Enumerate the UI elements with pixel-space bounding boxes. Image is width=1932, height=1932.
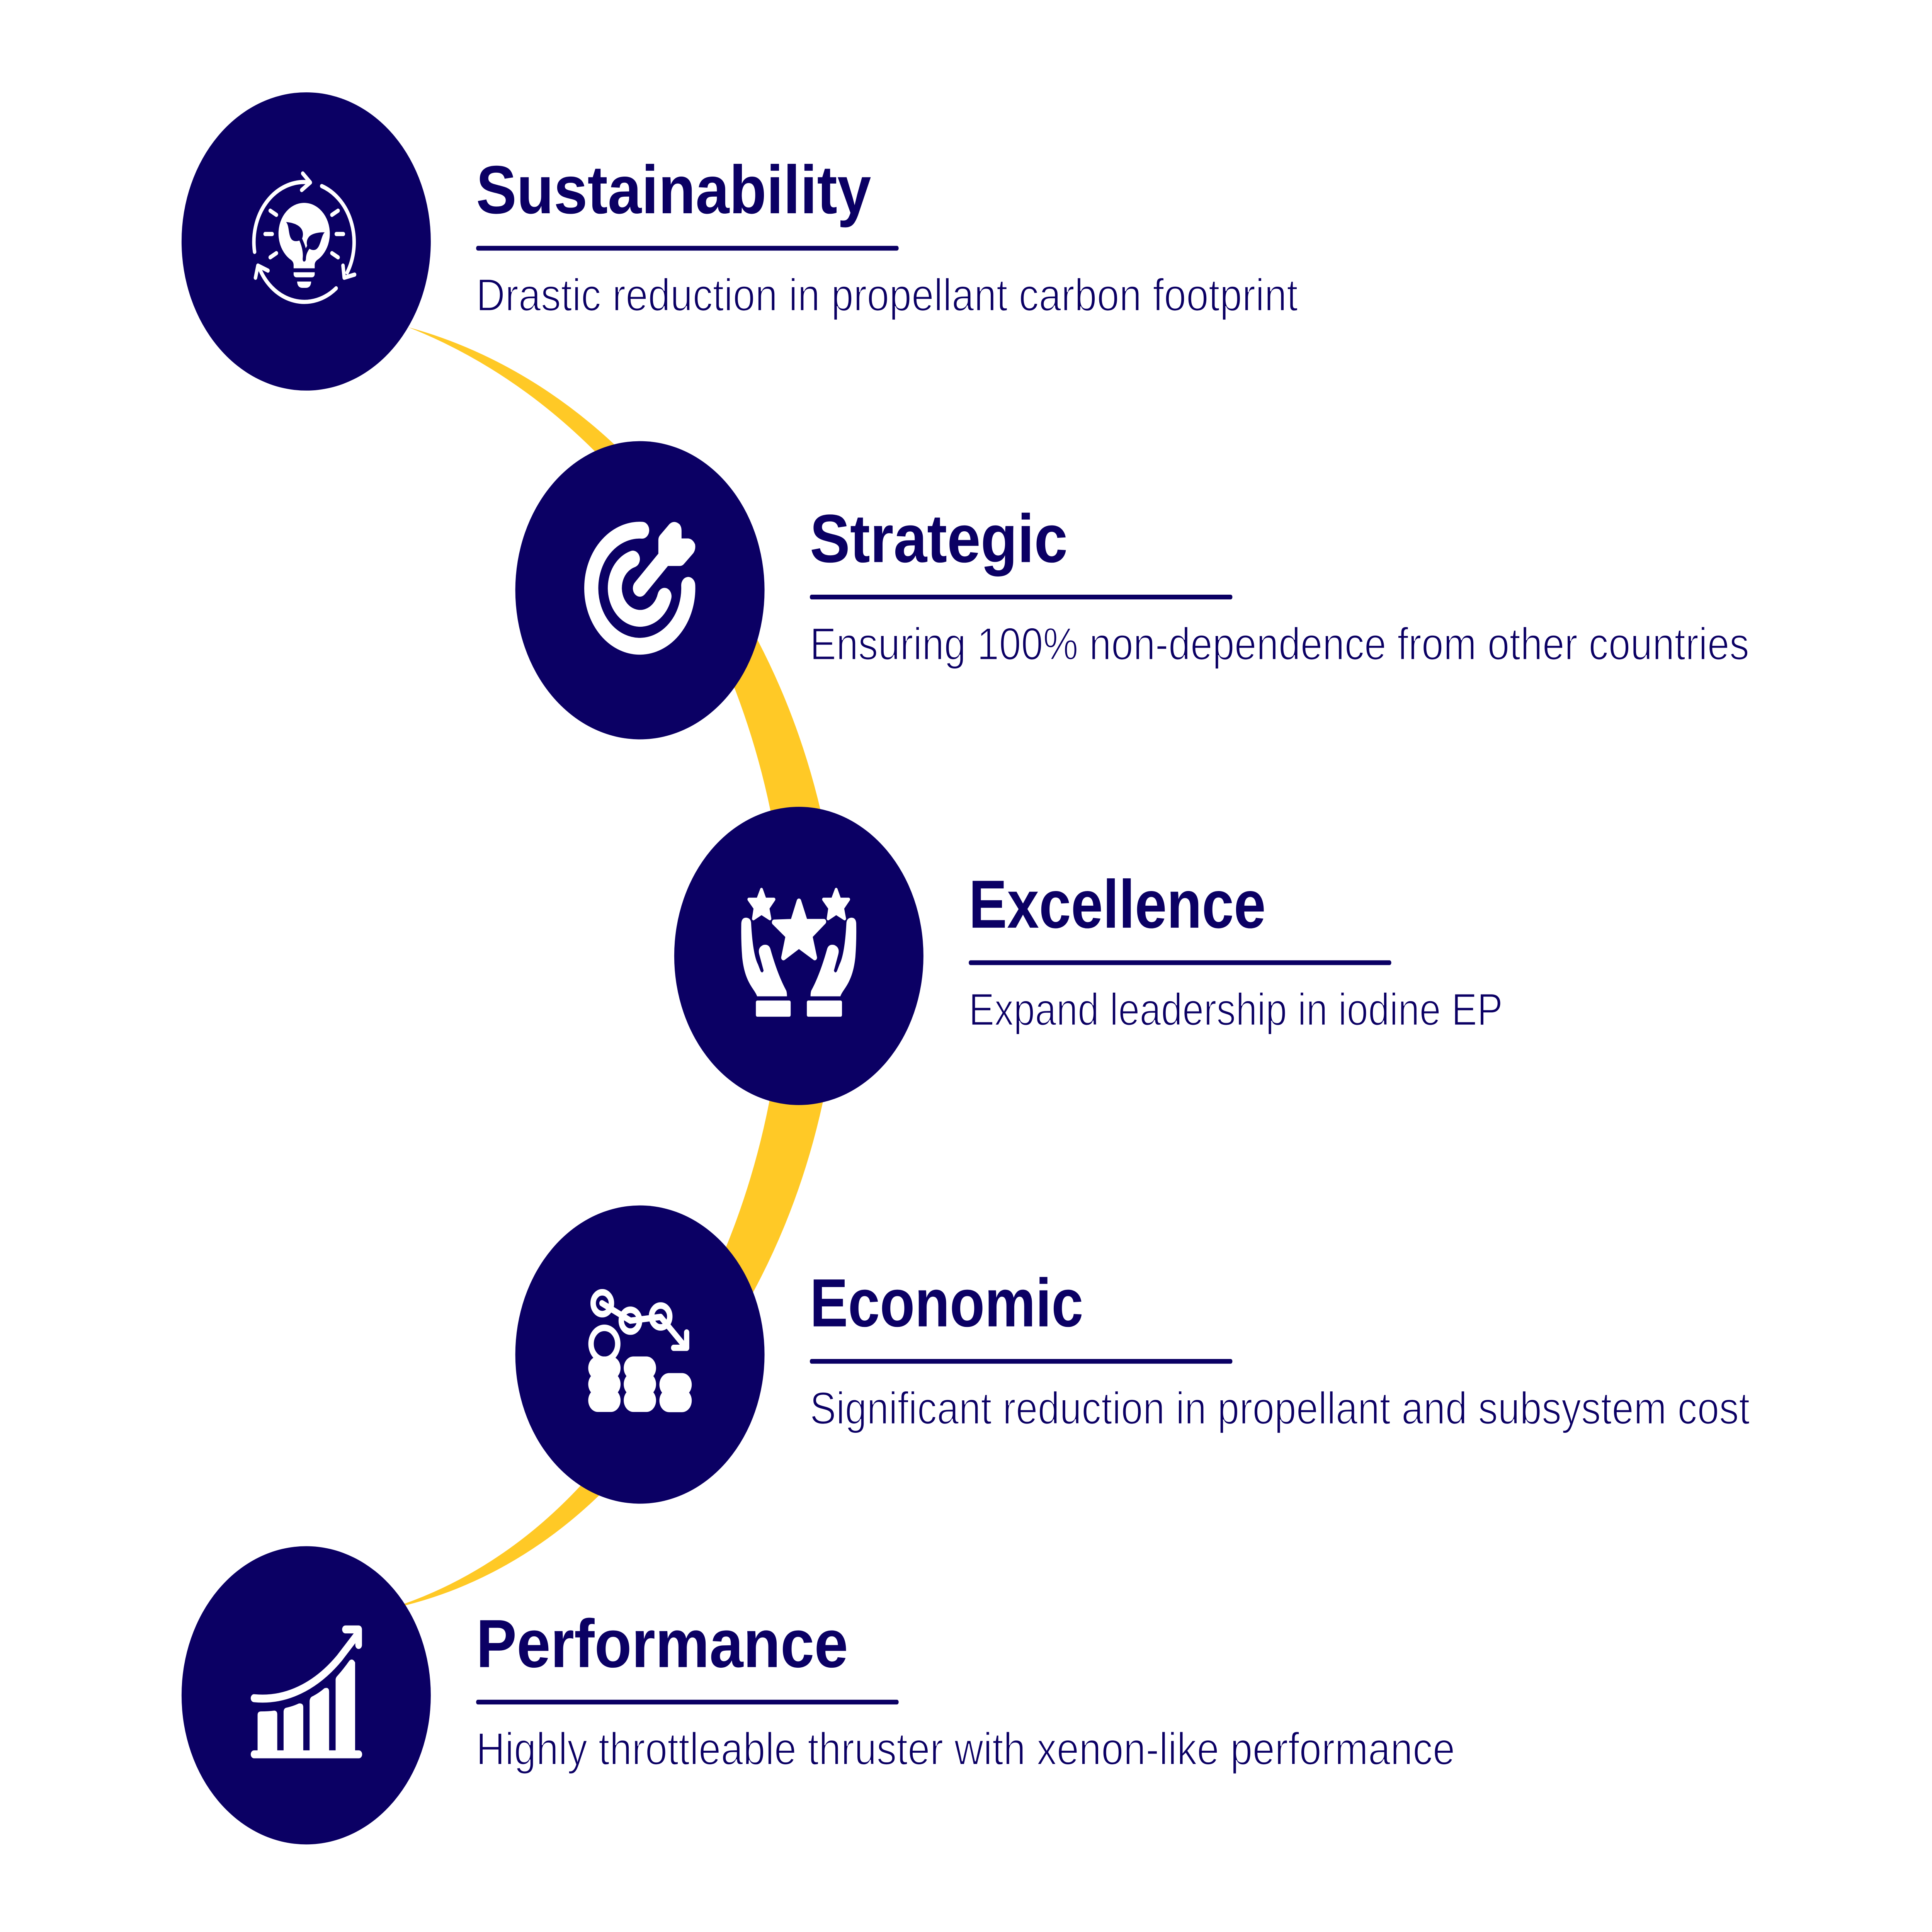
panel: economic xyxy=(515,1206,1750,1504)
text: performance description: Highly throttleable thruster with xenon-like performance xyxy=(476,1723,1455,1774)
underline: performance xyxy=(476,1700,899,1704)
circle badge: sustainability xyxy=(182,92,431,391)
underline: excellence xyxy=(969,960,1391,965)
panel: strategic xyxy=(515,441,1749,740)
underline: sustainability xyxy=(476,246,899,251)
icon: hands holding stars xyxy=(741,889,856,1017)
text: strategic description: Ensuring 100% non-dependence from other countries xyxy=(810,618,1749,669)
circle badge: excellence xyxy=(674,807,923,1105)
underline: strategic xyxy=(810,595,1232,599)
icon: light bulb with leaves and recycling arrows xyxy=(254,173,355,302)
icon: target with dart xyxy=(591,522,695,646)
text: sustainability description: Drastic reduction in propellant carbon footprint xyxy=(476,270,1298,320)
heading: performance: Performance xyxy=(476,1606,848,1682)
underline: economic xyxy=(810,1359,1232,1364)
icon: rising bar chart with arrow xyxy=(254,1629,359,1754)
panel: sustainability xyxy=(182,92,1298,391)
text: excellence description: Expand leadership in iodine EP xyxy=(969,984,1503,1035)
text: economic description: Significant reduction in propellant and subsystem cost xyxy=(810,1383,1750,1434)
icon: descending coin stacks with trend arrow xyxy=(588,1292,692,1412)
circle badge: performance xyxy=(182,1546,431,1844)
panel: excellence xyxy=(674,807,1503,1105)
heading: strategic: Strategic xyxy=(810,501,1068,577)
panel: performance xyxy=(182,1546,1455,1844)
heading: sustainability: Sustainability xyxy=(476,152,871,228)
heading: excellence: Excellence xyxy=(969,866,1266,942)
circle badge: economic xyxy=(515,1206,765,1504)
yellow crescent arc xyxy=(405,327,835,1605)
heading: economic: Economic xyxy=(810,1265,1083,1341)
circle badge: strategic xyxy=(515,441,765,740)
